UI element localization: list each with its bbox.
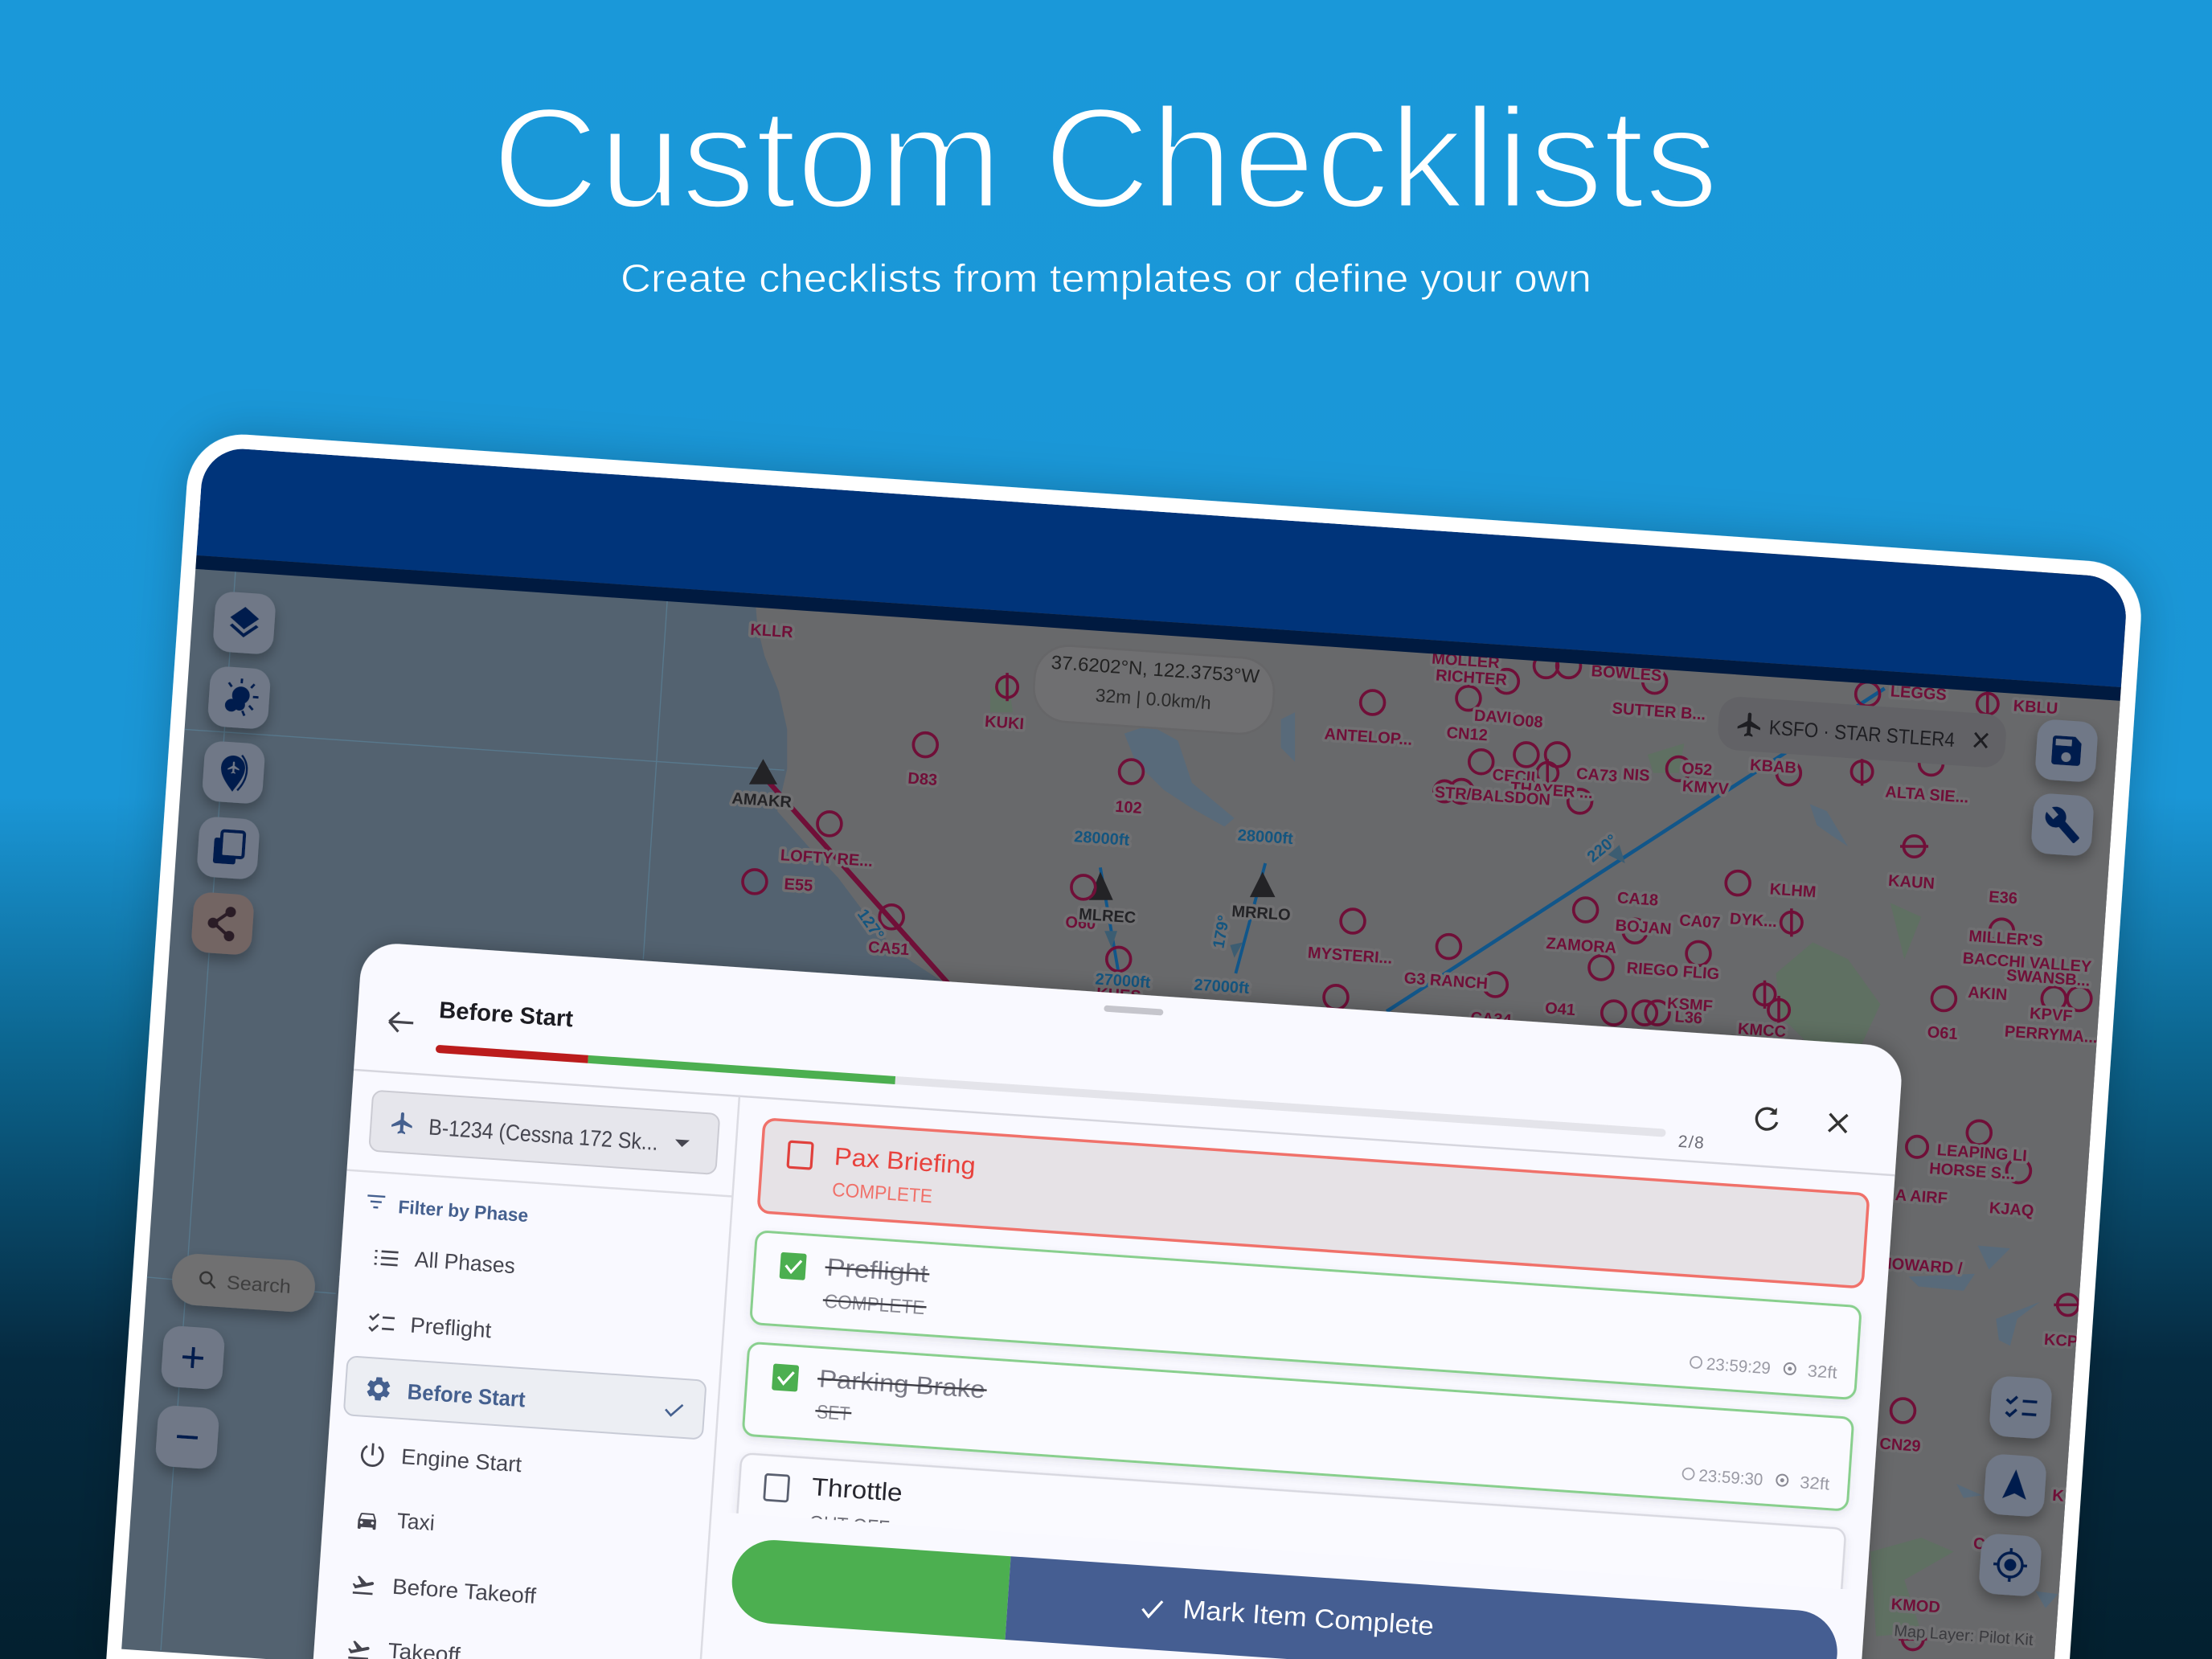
airport and waypoint labels: CA34: [1470, 1009, 1513, 1030]
phase: preflight: [369, 1310, 493, 1342]
airport and waypoint labels: 28000ft: [1237, 826, 1294, 848]
airport and waypoint labels: LEGGS: [1890, 682, 1947, 704]
icon: refresh: [1756, 1106, 1778, 1130]
airport and waypoint labels: DYK...: [1729, 910, 1778, 931]
airport and waypoint labels: 102: [1115, 798, 1142, 817]
item: preflight: 32ft: [1807, 1362, 1838, 1382]
phase: taxi: [358, 1506, 436, 1535]
waypoint markers: [749, 759, 1276, 900]
sea: [84, 536, 2144, 1659]
drag handle: [1104, 1006, 1164, 1016]
sidebar divider: [694, 1096, 739, 1659]
progress count: 2/8: [1677, 1133, 1705, 1153]
airport and waypoint labels: K: [2052, 1487, 2065, 1505]
item: parking brake: 23:59:30: [1698, 1467, 1763, 1489]
airport and waypoint labels: A AIRF: [1895, 1186, 1948, 1207]
airport and waypoint labels: LEAPING LI: [1936, 1141, 2028, 1165]
item: preflight: [751, 1231, 1861, 1399]
airport and waypoint labels: SWANSB...: [2005, 967, 2091, 990]
title: Custom Checklists: [492, 78, 1718, 238]
button: wrench: [2030, 793, 2095, 857]
airport and waypoint labels: CECIL: [1492, 766, 1541, 787]
airport and waypoint labels: MLREC: [1078, 906, 1137, 927]
flight routes: [763, 688, 1885, 1011]
button: save: [2034, 719, 2099, 783]
airport and waypoint labels: KMOD: [1890, 1596, 1941, 1616]
airport and waypoint labels: AKIN: [1968, 984, 2008, 1004]
airport and waypoint labels: DAVIS: [1473, 707, 1522, 728]
phase: before takeoff: Before Takeoff: [391, 1575, 537, 1608]
airport and waypoint labels: ALTA SIE...: [1885, 784, 1969, 807]
sidebar divider horizontal: [347, 1170, 732, 1196]
airport and waypoint labels: KJAQ: [1989, 1199, 2034, 1220]
land: [755, 564, 2130, 1659]
airport and waypoint labels: ZAMORA: [1546, 935, 1617, 957]
airport and waypoint labels: CA73: [1575, 765, 1618, 785]
coordinates bubble: [1051, 656, 1260, 730]
airport and waypoint labels: O41: [1544, 1000, 1576, 1019]
mark item complete button: [729, 1538, 1840, 1659]
airport and waypoint labels: 27000ft: [1194, 976, 1250, 997]
airport and waypoint labels: PERRYMA...: [2004, 1022, 2098, 1047]
phase: before start selected: Before Start: [407, 1379, 526, 1411]
airport and waypoint labels: HORSE S...: [1929, 1160, 2015, 1183]
airport and waypoint labels: 27000ft: [1095, 970, 1151, 992]
search pill: Search: [226, 1272, 292, 1298]
airport and waypoint labels: RIEGO FLIG: [1626, 960, 1720, 983]
airport and waypoint labels: CA51: [867, 939, 910, 959]
airport and waypoint labels: 127°: [854, 906, 887, 944]
airport and waypoint labels: O61: [1927, 1023, 1958, 1043]
airport and waypoint labels: D83: [907, 770, 938, 789]
panel sheet: [308, 941, 1903, 1659]
airport and waypoint labels: KSMF: [1666, 995, 1714, 1015]
aircraft selector: B-1234 (Cessna 172 Sk...: [428, 1114, 659, 1155]
icon: close: [1829, 1114, 1848, 1133]
aircraft selector: [369, 1091, 719, 1174]
airport and waypoint labels: E36: [1989, 888, 2018, 907]
airport and waypoint labels: CA18: [1616, 889, 1659, 910]
airport and waypoint labels: BACCHI VALLEY: [1962, 949, 2093, 976]
airport and waypoint labels: 179°: [1210, 914, 1233, 950]
airport and waypoint labels: KBAB: [1749, 756, 1797, 777]
item: pax briefing: Pax Briefing: [834, 1142, 977, 1180]
airport and waypoint labels: KMCC: [1737, 1020, 1787, 1041]
airport and waypoint labels: E55: [784, 875, 813, 895]
airport and waypoint labels: KHES: [1096, 985, 1141, 1006]
button: airport pin: [202, 740, 266, 805]
phase: taxi: Taxi: [396, 1509, 436, 1535]
item: throttle: Throttle: [811, 1473, 903, 1507]
item: pax briefing: [758, 1119, 1869, 1288]
phase: all phases: [374, 1244, 516, 1278]
airport and waypoint labels: SUTTER B...: [1612, 700, 1706, 724]
airport and waypoint labels: KBLU: [2013, 697, 2058, 718]
map: [84, 536, 2144, 1659]
route pill: KSFO · STAR STLER4: [1768, 716, 1956, 752]
button: weather: [207, 666, 271, 730]
airport and waypoint labels: 28000ft: [1074, 828, 1130, 850]
button: checklist: [1989, 1375, 2053, 1440]
airport and waypoint labels: MRRLO: [1231, 903, 1291, 924]
airport and waypoint labels: MYSTERI...: [1307, 944, 1393, 968]
item: throttle: OUT OFF: [809, 1512, 891, 1539]
airport and waypoint labels: LOFTY RE...: [780, 846, 874, 870]
mark item complete button: Mark Item Complete: [1182, 1594, 1435, 1641]
airport circles: [743, 653, 2091, 1423]
checklist panel: [308, 941, 1903, 1659]
airport and waypoint labels: Map Layer: Pilot Kit: [1894, 1622, 2034, 1649]
status strip: [195, 555, 2121, 701]
tablet screen: [84, 446, 2144, 1659]
airport and waypoint labels: BOWLES: [1591, 662, 1662, 685]
button: navigation: [1983, 1453, 2047, 1518]
phase: before takeoff: [352, 1571, 537, 1608]
button: my location: [1978, 1533, 2042, 1597]
route pill: [1738, 705, 1992, 765]
airport and waypoint labels: KUKI: [984, 713, 1025, 733]
panel heading: Before Start: [438, 997, 574, 1032]
airport and waypoint labels: O60: [1065, 914, 1096, 933]
airport and waypoint labels: STR/BALSDON: [1434, 784, 1551, 809]
header divider: [354, 1070, 1895, 1175]
coordinates bubble: 32m | 0.0km/h: [1095, 685, 1212, 713]
airport and waypoint labels: 220°: [1584, 831, 1621, 866]
airport and waypoint labels: KPVF: [2029, 1005, 2073, 1026]
airport and waypoint labels: THAYER ...: [1510, 779, 1593, 802]
airport and waypoint labels: C: [1972, 1535, 1985, 1553]
airport and waypoint labels: ANTELOP...: [1324, 725, 1413, 749]
airport and waypoint labels: KLLR: [750, 621, 794, 641]
top app bar: [195, 446, 2128, 701]
checklist items: [735, 1119, 1869, 1621]
zoom out button: [154, 1404, 220, 1470]
airport and waypoint labels: BOJAN: [1615, 917, 1672, 938]
search pill: [170, 1252, 317, 1313]
airport and waypoint labels: KAUN: [1887, 872, 1936, 893]
zoom in button: [160, 1325, 226, 1391]
airport and waypoint labels: AMAKR: [731, 790, 793, 812]
map grid lines: [141, 570, 784, 1650]
item: throttle: [735, 1453, 1845, 1621]
button: layers: [212, 591, 276, 655]
airport and waypoint labels: O08: [1512, 712, 1543, 731]
airport and waypoint labels: RICHTER: [1435, 666, 1508, 689]
item: preflight: Preflight: [825, 1253, 929, 1288]
airport and waypoint labels: CA07: [1679, 911, 1721, 932]
water and vegetation: [990, 674, 2058, 1636]
phase: engine start: [361, 1442, 522, 1477]
airport and waypoint labels: NIS: [1622, 765, 1650, 785]
phase: engine start: Engine Start: [400, 1444, 522, 1477]
item: parking brake: [743, 1342, 1854, 1510]
item: preflight: COMPLETE: [824, 1291, 925, 1319]
button: copy: [196, 816, 260, 880]
progress bar: [436, 1045, 1666, 1137]
phase: takeoff: [347, 1636, 461, 1659]
phase: before start selected: [344, 1356, 707, 1440]
airport and waypoint labels: CN12: [1446, 724, 1488, 744]
airport and waypoint labels: [731, 621, 2098, 1649]
item: parking brake: Parking Brake: [818, 1364, 986, 1403]
item: pax briefing: COMPLETE: [831, 1179, 933, 1207]
airport and waypoint labels: O52: [1682, 760, 1713, 780]
button: share: [190, 891, 255, 956]
back arrow: [388, 1012, 414, 1033]
phase: all phases: All Phases: [414, 1247, 516, 1278]
coordinates bubble: 37.6202°N, 122.3753°W: [1051, 653, 1260, 688]
item: parking brake: SET: [816, 1401, 850, 1425]
airport and waypoint labels: KLHM: [1769, 880, 1817, 901]
filter by phase heading: Filter by Phase: [398, 1196, 529, 1226]
item: preflight: 23:59:29: [1706, 1355, 1772, 1378]
airport and waypoint labels: KCP: [2043, 1331, 2079, 1351]
phase: preflight: Preflight: [409, 1313, 493, 1342]
airport and waypoint labels: KMYV: [1682, 777, 1730, 798]
airport and waypoint labels: HOWARD /: [1880, 1255, 1963, 1278]
airport and waypoint labels: G3 RANCH: [1403, 969, 1489, 993]
item: parking brake: 32ft: [1799, 1473, 1830, 1494]
subtitle: Create checklists from templates or define your own: [621, 257, 1591, 301]
airport and waypoint labels: MILLER'S: [1968, 928, 2044, 950]
towered airport markers: [997, 673, 2082, 1649]
airport and waypoint labels: MOLLER: [1432, 649, 1501, 672]
airport and waypoint labels: CN29: [1879, 1435, 1921, 1456]
airport and waypoint labels: L36: [1674, 1008, 1703, 1028]
tablet frame: [106, 431, 2144, 1659]
